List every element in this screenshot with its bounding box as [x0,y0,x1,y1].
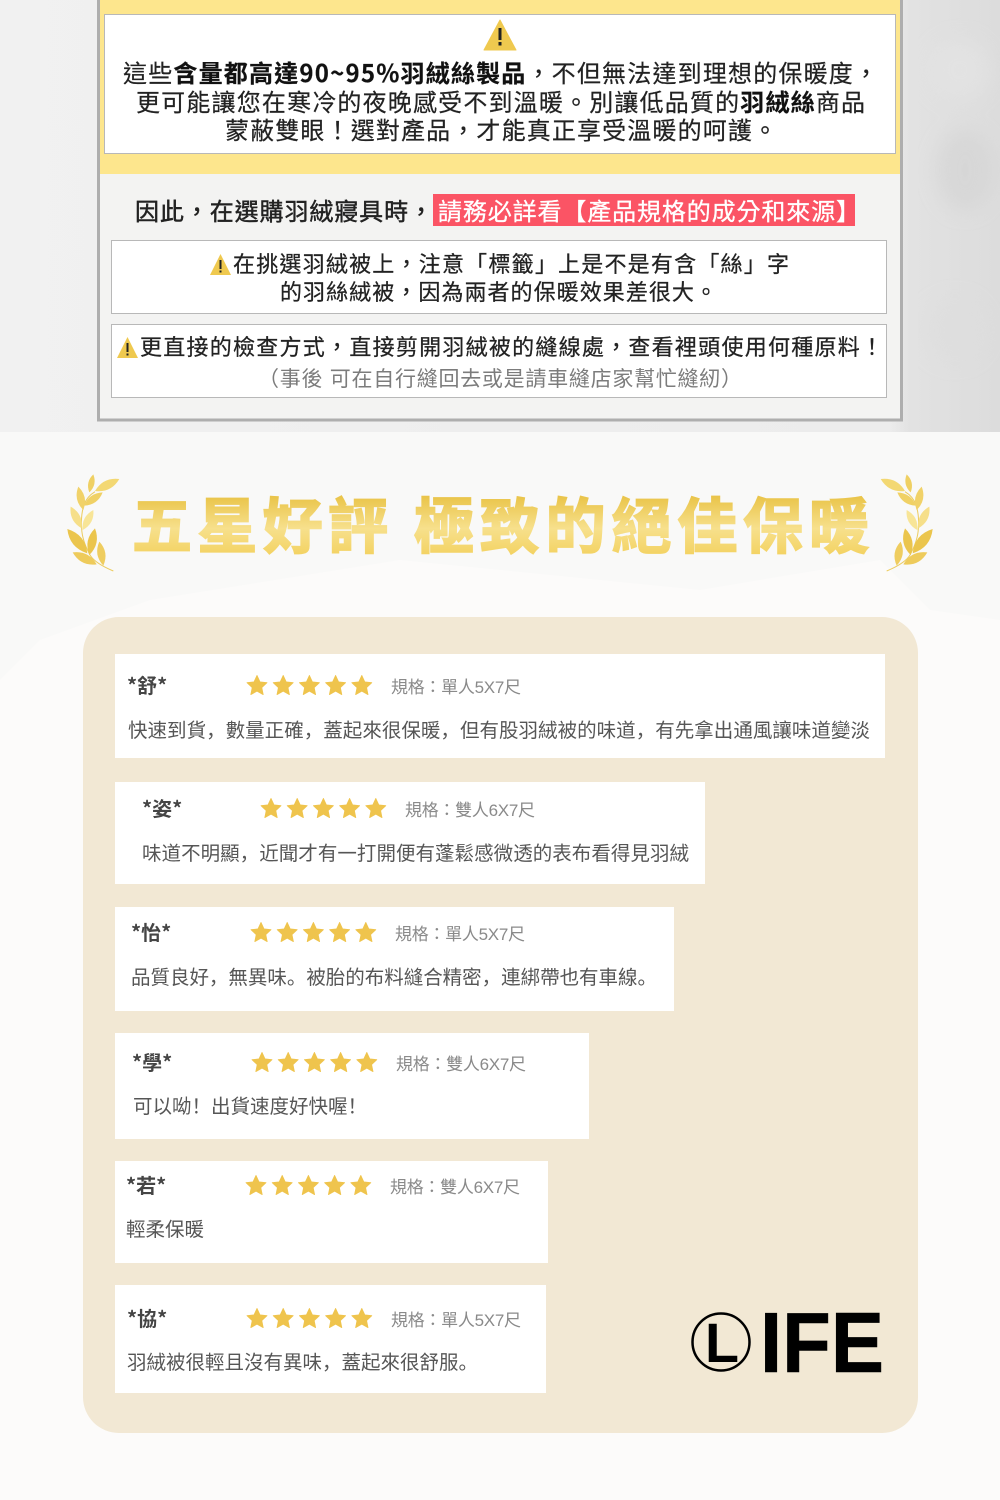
review card 4 [115,1033,589,1139]
product spec: 規格：雙人6X7尺 [390,1178,520,1197]
review card 3 [115,907,674,1011]
tip text: （事後 可在自行縫回去或是請車縫店家幫忙縫紉） [258,368,742,391]
icon: left laurel [67,474,119,571]
five star rating [246,1175,371,1195]
reviewer name: *協* [127,1303,167,1332]
icon: warning [210,254,231,275]
review card 6 [115,1285,546,1393]
logo: LIFE [692,1296,884,1391]
heading: buying advice: 因此，在選購羽絨寢具時， [135,199,433,226]
review card 1 [115,654,885,758]
reviewer name: *若* [126,1170,166,1199]
icon: large warning triangle [484,20,516,50]
review text: 可以呦！出貨速度好快喔！ [133,1096,367,1118]
marble top background [0,0,1000,432]
product spec: 規格：單人5X7尺 [391,678,521,697]
title: five star reviews: 五星好評 [132,494,388,561]
five star rating [261,798,386,818]
notice text line 1: 這些含量都高達90~95%羽絨絲製品，不但無法達到理想的保暖度， [123,54,878,89]
panel: reviews [83,617,918,1433]
highlighted heading: 請務必詳看【產品規格的成分和來源】 [438,199,860,226]
review text: 快速到貨，數量正確，蓋起來很保暖，但有股羽絨被的味道，有先拿出通風讓味道變淡 [128,719,870,742]
tip text: 更直接的檢查方式，直接剪開羽絨被的縫線處，查看裡頭使用何種原料！ [140,335,883,360]
five star rating [247,675,372,695]
tip box: label check [112,240,886,314]
five star rating [247,1308,372,1328]
reviewer name: *姿* [142,793,182,822]
review card 5 [115,1161,548,1263]
product spec: 規格：雙人6X7尺 [396,1055,526,1074]
title: five star reviews: 極致的絕佳保暖 [414,494,869,561]
icon: warning [117,337,138,358]
tip text [233,252,789,305]
product spec: 規格：單人5X7尺 [391,1311,521,1330]
review card 2 [115,782,705,884]
logo: LIFE: IFE [760,1296,884,1391]
review text: 品質良好，無異味。被胎的布料縫合精密，連綁帶也有車線。 [131,967,657,989]
notice text line 3: 蒙蔽雙眼！選對產品，才能真正享受溫暖的呵護。 [225,118,777,145]
notice text line 2: 更可能讓您在寒冷的夜晚感受不到溫暖。別讓低品質的羽絨絲商品 [136,83,865,118]
review text: 味道不明顯，近聞才有一打開便有蓬鬆感微透的表布看得見羽絨 [142,843,689,865]
tip box: cut open check [112,324,886,398]
five star rating [252,1052,377,1072]
icon: right laurel [881,474,933,571]
notice panel [98,0,902,420]
tip text: 的羽絲絨被，因為兩者的保暖效果差很大。 [280,280,717,305]
reviewer name: *怡* [131,917,171,946]
product spec: 規格：雙人6X7尺 [405,801,535,820]
tip text [140,335,883,391]
logo: LIFE: L [705,1311,739,1374]
review text: 羽絨被很輕且沒有異味，蓋起來很舒服。 [127,1352,478,1374]
review text: 輕柔保暖 [126,1219,204,1241]
reviewer name: *舒* [127,670,167,699]
five star rating [251,922,376,942]
reviewer name: *學* [132,1047,172,1076]
tip text: 在挑選羽絨被上，注意「標籤」上是不是有含「絲」字 [233,252,789,277]
title: five star reviews [132,494,869,561]
product spec: 規格：單人5X7尺 [395,925,525,944]
yellow notice band [100,0,900,174]
